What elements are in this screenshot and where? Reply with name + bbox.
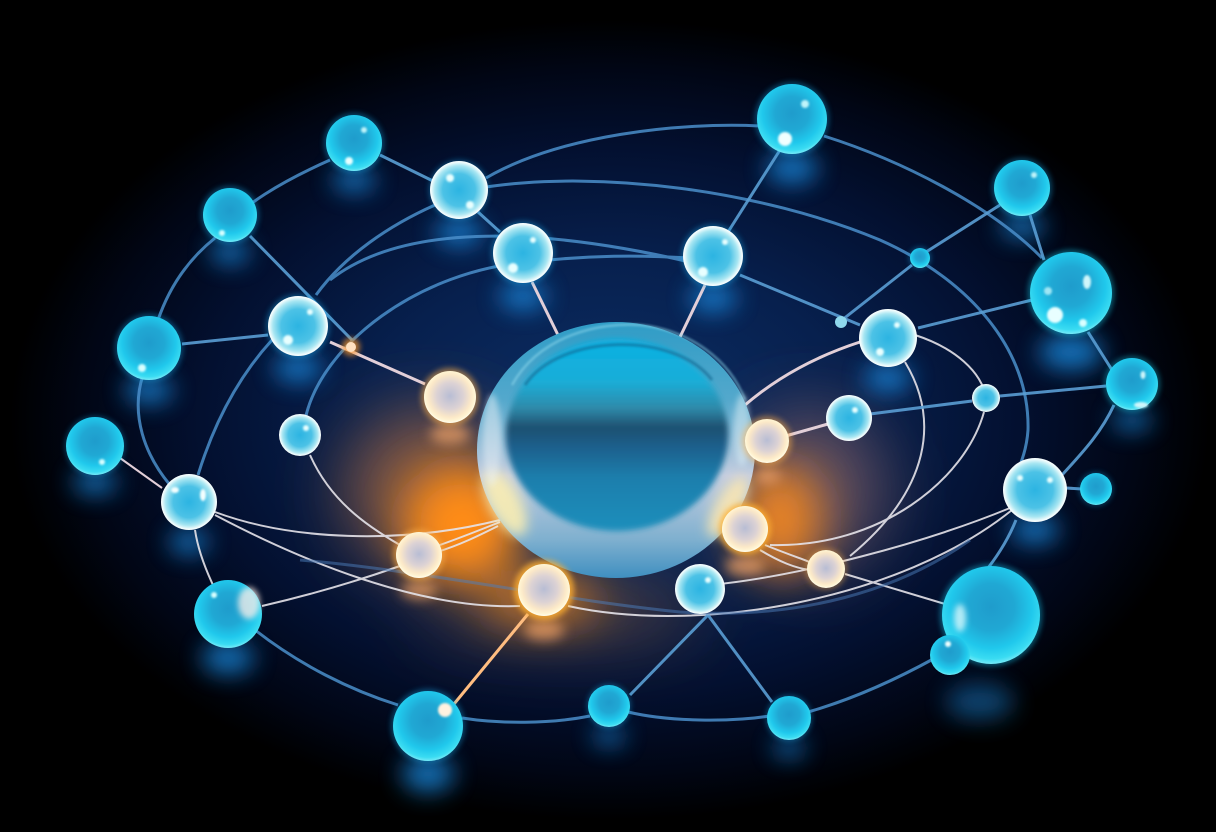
pale spokes near the bowl xyxy=(120,282,860,488)
bowl warm left highlight xyxy=(474,464,536,542)
orbit lines xyxy=(138,125,1042,722)
bowl right sheen xyxy=(734,394,750,466)
blue spheres xyxy=(65,82,1160,763)
bowl left sheen xyxy=(483,394,501,486)
spokes xyxy=(182,150,1114,702)
sphere floor reflections xyxy=(73,152,1152,792)
bowl opening xyxy=(506,339,728,531)
bowl warm right highlight xyxy=(700,471,756,543)
central glass bowl xyxy=(474,322,756,578)
warm spoke xyxy=(454,614,528,704)
bowl inner rim shadow xyxy=(525,345,712,385)
pale-rimmed spheres xyxy=(161,160,1000,614)
thin warm lines around the bowl xyxy=(195,335,1012,616)
warm reflections under inner spheres xyxy=(401,424,781,640)
warm-lit spheres xyxy=(342,338,847,620)
bowl top rim highlight xyxy=(512,325,745,400)
orange glow behind bowl xyxy=(345,410,885,640)
bowl body xyxy=(477,322,755,578)
